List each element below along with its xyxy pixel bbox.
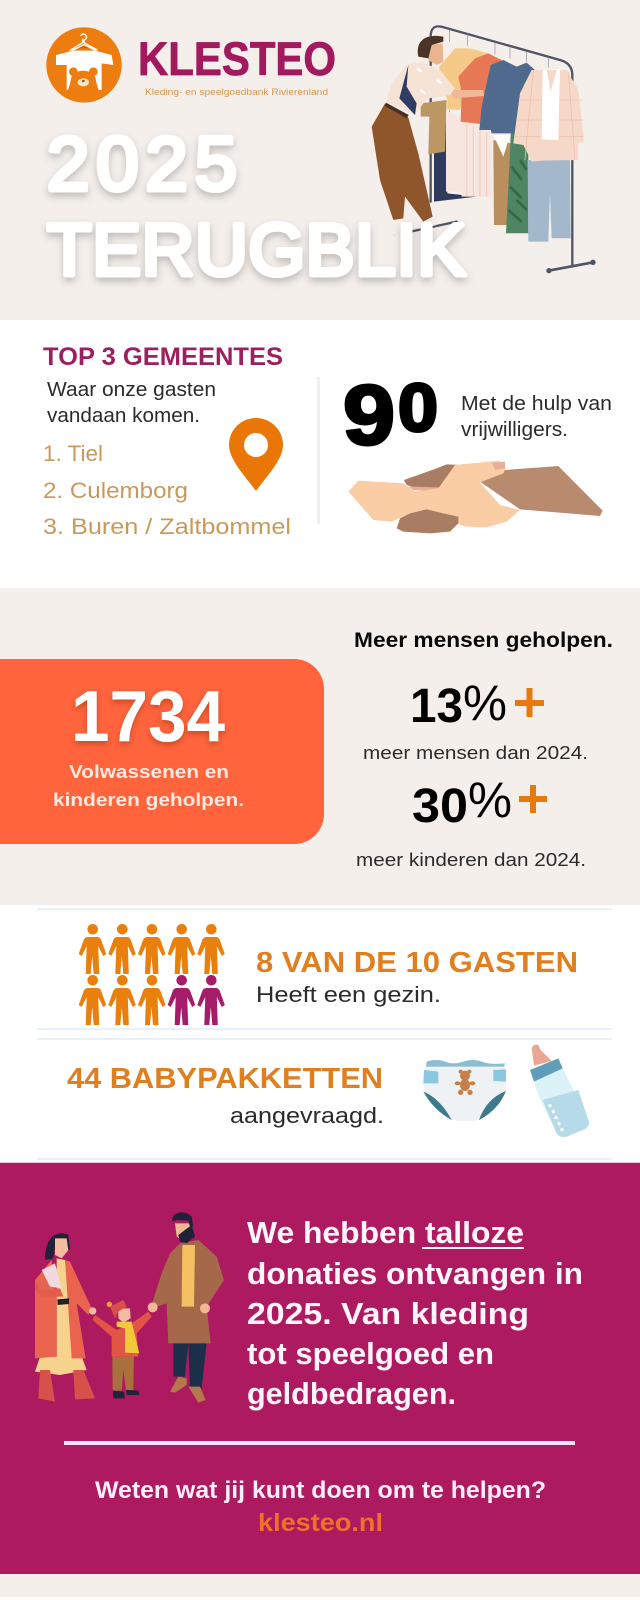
list: municipalities: 1. Tiel [43, 441, 103, 466]
rack frame [395, 26, 593, 271]
pictogram: 8 of 10 guests [79, 924, 225, 1025]
heading: 8 of 10 guests: 8 VAN DE 10 GASTEN [256, 947, 578, 979]
list: municipalities: 3. Buren / Zaltbommel [43, 514, 291, 539]
stat: 13 percent [410, 675, 544, 733]
icon: baby bottle [530, 1045, 589, 1137]
number: 90 volunteers: 0 [398, 370, 438, 446]
text: donations message: geldbedragen. [247, 1376, 456, 1411]
heading: 44 baby packages: 44 BABYPAKKETTEN [67, 1063, 383, 1095]
text: has a family: Heeft een gezin. [256, 982, 441, 1007]
text: intro [47, 379, 216, 427]
link: klesteo.nl: klesteo.nl [258, 1509, 383, 1537]
panel: people helped [0, 588, 640, 905]
stat: 13 percent: % [463, 675, 507, 731]
panel: header [0, 0, 640, 320]
man [148, 1212, 224, 1403]
stat: 30 percent: % [468, 772, 512, 828]
text: volunteers [461, 393, 612, 441]
illustration: clothes rack with shopper [372, 26, 596, 273]
number: 90 volunteers [343, 368, 438, 462]
text: adults and children [53, 761, 244, 810]
text: volunteers: vrijwilligers. [461, 419, 568, 441]
text: adults and children: kinderen geholpen. [53, 789, 244, 810]
shopper [372, 36, 484, 237]
number: 1734: 1734 [71, 677, 225, 757]
icon: location pin [229, 418, 283, 491]
clothes [421, 48, 584, 242]
woman [35, 1233, 96, 1402]
heading: more people helped: Meer mensen geholpen. [354, 628, 613, 652]
illustration: family [35, 1212, 224, 1403]
text: more people: meer mensen dan 2024. [363, 742, 588, 763]
icon: diaper [423, 1060, 506, 1121]
child [93, 1300, 152, 1398]
card: 1734 helped [0, 659, 324, 844]
icon: helping hands [348, 461, 603, 533]
text: requested: aangevraagd. [230, 1103, 384, 1128]
text: volunteers: Met de hulp van [461, 393, 612, 415]
text: donations message [247, 1215, 583, 1411]
text: donations message: donaties ontvangen in [247, 1256, 583, 1291]
text: adults and children: Volwassenen en [69, 761, 229, 782]
title line: terugblik: TERUGBLIK [47, 210, 466, 291]
title [47, 122, 466, 291]
text: intro: vandaan komen. [47, 405, 200, 427]
panel: top 3 gemeentes and volunteers [43, 343, 612, 539]
tagline: Kleding- en speelgoedbank Rivierenland [145, 87, 328, 97]
call to action: Weten wat jij kunt doen om te helpen? [95, 1477, 546, 1504]
text: donations message: tot speelgoed en [247, 1336, 494, 1371]
text: donations message: We hebben talloze [247, 1215, 524, 1250]
heading: top 3 gemeentes: TOP 3 GEMEENTES [43, 343, 283, 371]
title line: year: 2025 [47, 122, 237, 207]
text: more children: meer kinderen dan 2024. [356, 849, 586, 870]
panel: donations [0, 1162, 640, 1574]
stat: 30 percent: 30 [412, 780, 468, 833]
stat: 30 percent [412, 772, 547, 833]
number: 90 volunteers: 9 [343, 368, 395, 462]
footer band [0, 1574, 640, 1597]
panel: families and baby packages [37, 908, 612, 1160]
list: municipalities: 2. Culemborg [43, 478, 188, 503]
stat: 13 percent: 13 [410, 680, 463, 733]
icon: orange logo badge [46, 27, 122, 103]
wordmark: KLESTEO [138, 32, 336, 85]
logo [46, 27, 336, 103]
text: intro: Waar onze gasten [47, 379, 216, 401]
text: donations message: 2025. Van kleding [247, 1296, 529, 1331]
list: municipalities [43, 441, 291, 539]
